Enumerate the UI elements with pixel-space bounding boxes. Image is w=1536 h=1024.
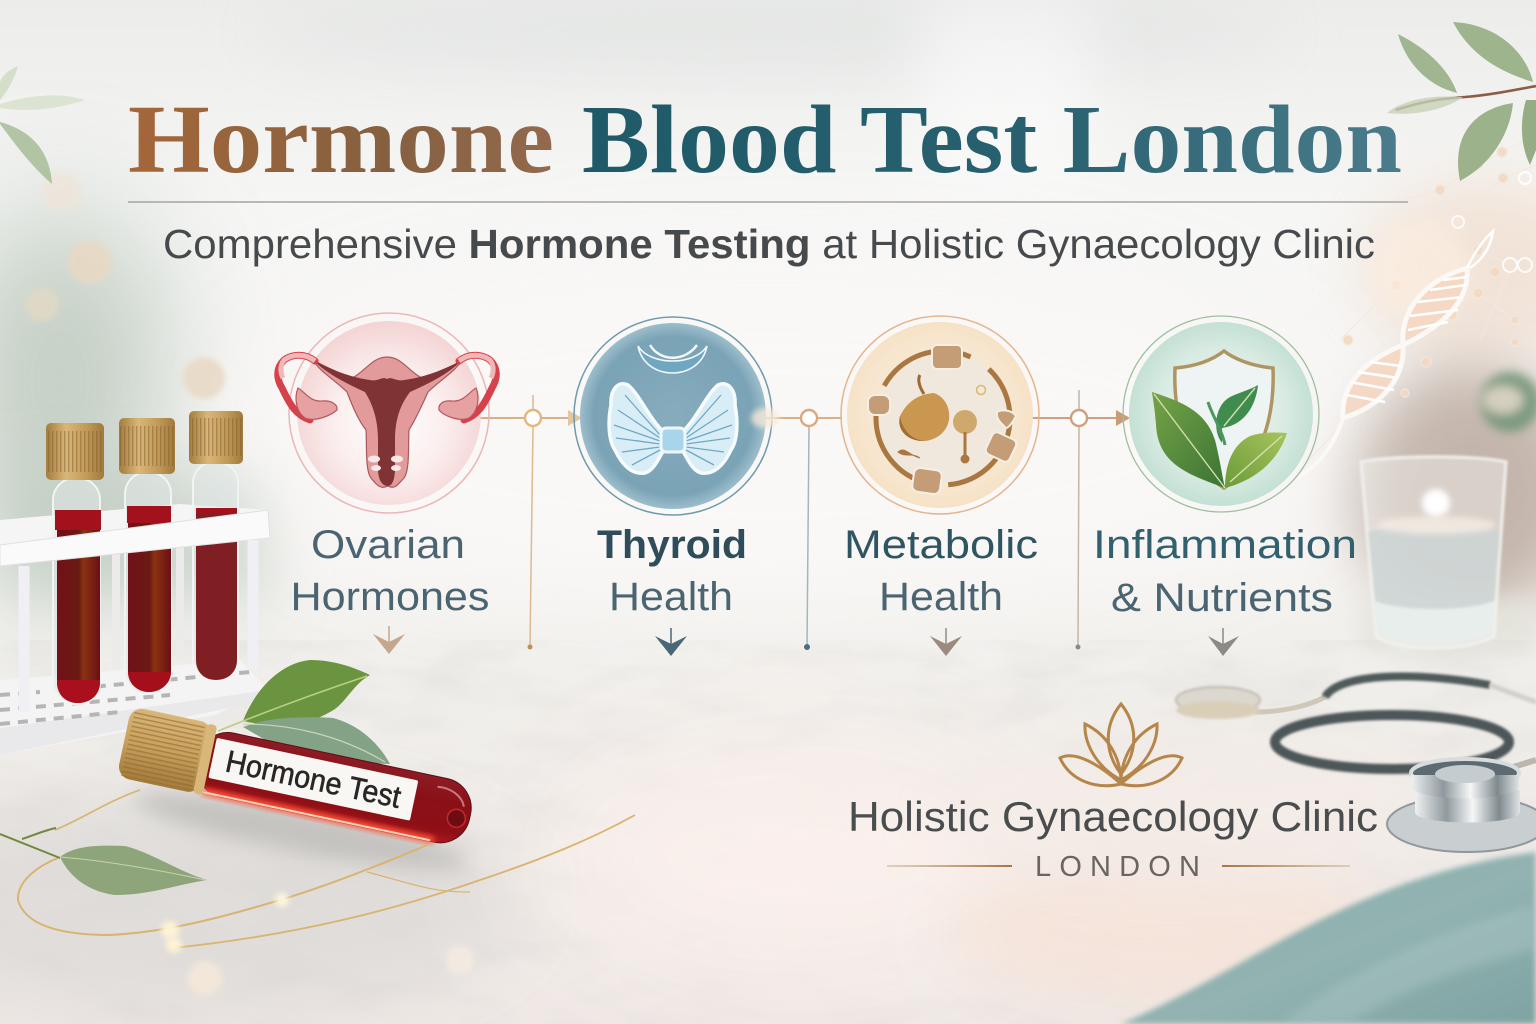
icon: thyroid: [574, 317, 779, 515]
logo: [848, 704, 1378, 883]
label line: health: Health: [879, 575, 1003, 619]
top-left leaves: [0, 66, 85, 184]
label line: nutrients: & Nutrients: [1111, 576, 1333, 620]
gold thread: [18, 790, 635, 953]
top-right leaves: [1387, 22, 1536, 181]
icon: metabolic: [841, 316, 1039, 514]
arrow: down: [655, 628, 687, 656]
subtitle: Comprehensive Hormone Testing at Holistic Gynaecology Clinic: [163, 221, 1375, 267]
rack surface and posts: [0, 504, 268, 546]
molecule network: [1300, 135, 1536, 470]
blood tube 1: [46, 423, 104, 704]
title: Blood Test London: [582, 86, 1402, 194]
label line: health: Health: [609, 575, 733, 619]
clinic name: Holistic Gynaecology Clinic: [848, 793, 1378, 840]
icon: shield and leaves: [1123, 316, 1319, 512]
arrow: down: [373, 626, 405, 654]
panel: metabolic health: [841, 316, 1039, 656]
arrow: down: [930, 628, 962, 656]
title: [128, 86, 1402, 194]
rack base: [0, 660, 268, 755]
hormone test tube: [117, 706, 478, 850]
leaf on table: [0, 828, 207, 895]
blurred green ornament: [1480, 372, 1536, 432]
rule left: [887, 865, 1012, 867]
rack front bar: [0, 510, 270, 566]
panel: ovarian hormones: [278, 313, 496, 654]
icon: lotus: [1060, 704, 1182, 786]
DNA helix: [1295, 220, 1493, 478]
leaves by lying tube: [218, 660, 390, 764]
connector lines: [478, 390, 1130, 650]
title: Hormone: [128, 86, 554, 194]
blood tube 2: [119, 418, 175, 694]
tube label: Hormone Test: [223, 744, 404, 815]
location: LONDON: [1035, 851, 1200, 883]
arrow: down: [1208, 628, 1239, 656]
test tube rack with tubes: [0, 411, 270, 755]
blood tube 3: [189, 411, 243, 680]
stethoscope: [1176, 676, 1536, 852]
label: metabolic: Metabolic: [844, 523, 1038, 567]
shadow under lying tube: [129, 776, 471, 884]
rule right: [1222, 865, 1350, 867]
teal cloth: [1120, 852, 1536, 1024]
title rule: [128, 201, 1408, 203]
label: thyroid: Thyroid: [597, 523, 747, 567]
icon: uterus: [278, 313, 496, 513]
label: ovarian hormones: Ovarian: [311, 523, 465, 567]
rack front posts: [24, 540, 253, 712]
panel: inflammation and nutrients: [1093, 316, 1357, 656]
panel: thyroid health: [574, 317, 779, 656]
label: inflammation: Inflammation: [1093, 523, 1357, 567]
label line: hormones: Hormones: [290, 575, 490, 619]
water glass: [1361, 457, 1506, 648]
